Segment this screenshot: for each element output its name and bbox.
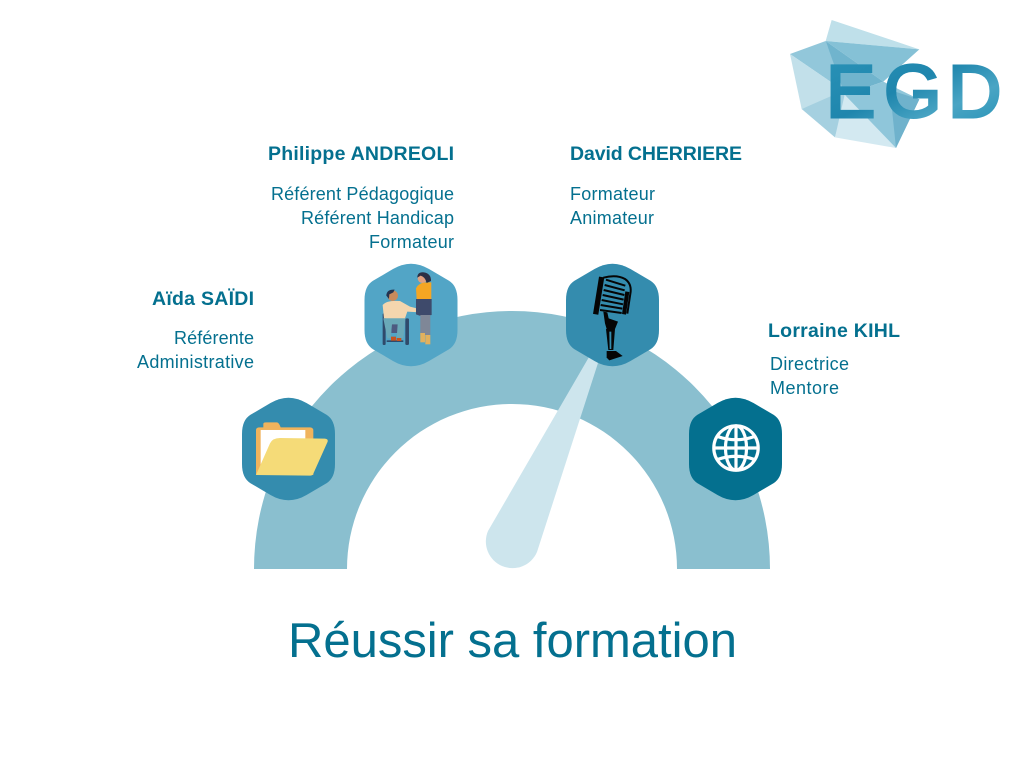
person: Lorraine KIHL — [768, 320, 900, 398]
icon: microphone — [596, 276, 631, 360]
person: Lorraine KIHL: Directrice — [770, 354, 849, 374]
person: Aïda SAÏDI: Administrative — [137, 352, 254, 372]
hexagon: globe — [689, 398, 782, 500]
hexagon: microphone — [566, 264, 659, 366]
person: Philippe ANDREOLI: Référent Pédagogique — [271, 184, 454, 204]
person: David CHERRIERE — [570, 143, 742, 228]
person: David CHERRIERE: Animateur — [570, 208, 654, 228]
logo: EGD: EGD — [826, 50, 1001, 133]
logo: EGD — [790, 20, 1001, 148]
title: Réussir sa formation — [288, 614, 737, 668]
person: David CHERRIERE: Formateur — [570, 184, 655, 204]
icon: globe — [714, 426, 758, 470]
person: Philippe ANDREOLI — [268, 143, 454, 252]
hexagon: folder — [242, 398, 335, 500]
person: David CHERRIERE: David CHERRIERE — [570, 143, 742, 165]
person: Philippe ANDREOLI: Philippe ANDREOLI — [268, 143, 454, 165]
gauge needle — [486, 357, 598, 568]
icon: folder — [256, 422, 328, 476]
person: Aïda SAÏDI: Aïda SAÏDI — [152, 287, 254, 310]
person: Aïda SAÏDI: Référente — [174, 328, 254, 348]
person: Philippe ANDREOLI: Formateur — [369, 232, 454, 252]
person: Lorraine KIHL: Lorraine KIHL — [768, 320, 900, 342]
hexagon: people — [364, 264, 458, 366]
person: Aïda SAÏDI — [137, 287, 254, 372]
icon: person in wheelchair and standing woman — [383, 272, 432, 345]
gauge arc — [254, 311, 770, 569]
person: Lorraine KIHL: Mentore — [770, 378, 839, 398]
person: Philippe ANDREOLI: Référent Handicap — [301, 208, 454, 228]
